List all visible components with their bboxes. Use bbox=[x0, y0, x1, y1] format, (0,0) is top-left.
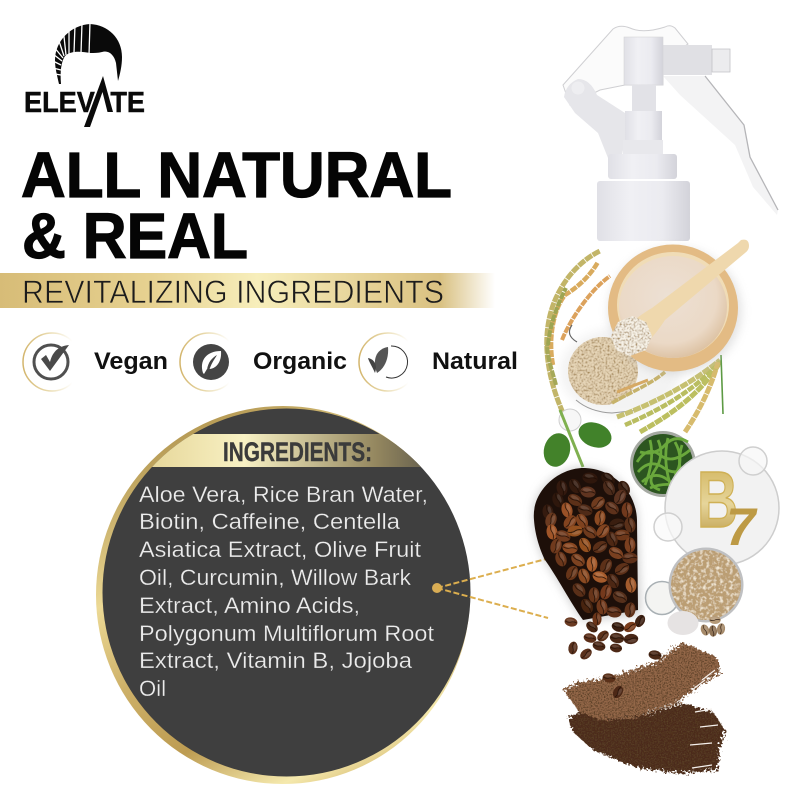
ingredients list: Extract, Vitamin B, Jojoba bbox=[139, 648, 413, 673]
wooden spoon bbox=[620, 240, 749, 348]
ingredients list: Asiatica Extract, Olive Fruit bbox=[139, 537, 421, 562]
gold crescent bbox=[96, 406, 470, 784]
callout lines bbox=[432, 559, 548, 618]
coffee beans bbox=[541, 470, 638, 619]
trigger bbox=[663, 76, 778, 215]
badge: organic: Organic bbox=[253, 348, 347, 375]
vitamin B7 bubble: B bbox=[697, 455, 738, 544]
ground coffee bbox=[563, 643, 725, 773]
logo wordmark: ELEVATE bbox=[24, 87, 145, 119]
ingredients list: Biotin, Caffeine, Centella bbox=[139, 509, 401, 534]
spray pump bbox=[563, 26, 778, 241]
subtitle band: REVITALIZING INGREDIENTS bbox=[22, 274, 444, 310]
light coffee grounds bbox=[563, 643, 720, 720]
ingredients list: Aloe Vera, Rice Bran Water, bbox=[139, 482, 428, 507]
dark coffee grounds bbox=[568, 703, 725, 773]
vitamin B7 bubble: 7 bbox=[726, 498, 758, 557]
collar bbox=[625, 111, 662, 140]
seaweed bowl bbox=[630, 431, 696, 497]
rice water bowl bbox=[608, 240, 749, 374]
cream bowl bbox=[646, 582, 678, 614]
cap bbox=[597, 181, 690, 241]
vitamin B7 bubble bbox=[654, 447, 779, 565]
ingredients list: Polygonum Multiflorum Root bbox=[139, 621, 434, 646]
ingredients list bbox=[139, 482, 434, 701]
panel: ingredients bbox=[96, 406, 470, 784]
icon: logo peak bbox=[84, 76, 113, 127]
ingredients list: Oil bbox=[139, 676, 166, 701]
ingredients list: Oil, Curcumin, Willow Bark bbox=[139, 565, 412, 590]
badge: vegan bbox=[23, 333, 168, 391]
rice pile bbox=[568, 337, 638, 405]
oats bowl bbox=[668, 548, 744, 622]
logo: Elevate bbox=[24, 22, 145, 127]
title: ALL NATURAL bbox=[21, 139, 452, 211]
badge: natural bbox=[359, 333, 518, 391]
pump shroud bbox=[563, 26, 688, 105]
ingredients list: Extract, Amino Acids, bbox=[139, 593, 360, 618]
title bbox=[21, 139, 452, 272]
title: & REAL bbox=[22, 200, 248, 272]
nozzle bbox=[663, 45, 712, 75]
spilled beans bbox=[564, 613, 647, 662]
egg and small beans bbox=[668, 611, 726, 637]
ingredients heading band: INGREDIENTS: bbox=[223, 437, 372, 467]
stem bbox=[632, 85, 656, 111]
rice stalks bbox=[547, 251, 723, 432]
ingredients heading band bbox=[152, 434, 421, 467]
lever bbox=[564, 79, 625, 158]
head bbox=[624, 37, 663, 85]
coffee scoop bbox=[534, 468, 647, 662]
badge: vegan: Vegan bbox=[94, 348, 168, 375]
badge: organic bbox=[180, 333, 347, 391]
rice on spoon bbox=[611, 316, 652, 356]
dark disc bbox=[102, 408, 470, 776]
icon: hair silhouette bbox=[53, 22, 122, 84]
spinach leaves bbox=[540, 409, 615, 470]
badge: natural: Natural bbox=[432, 348, 518, 375]
